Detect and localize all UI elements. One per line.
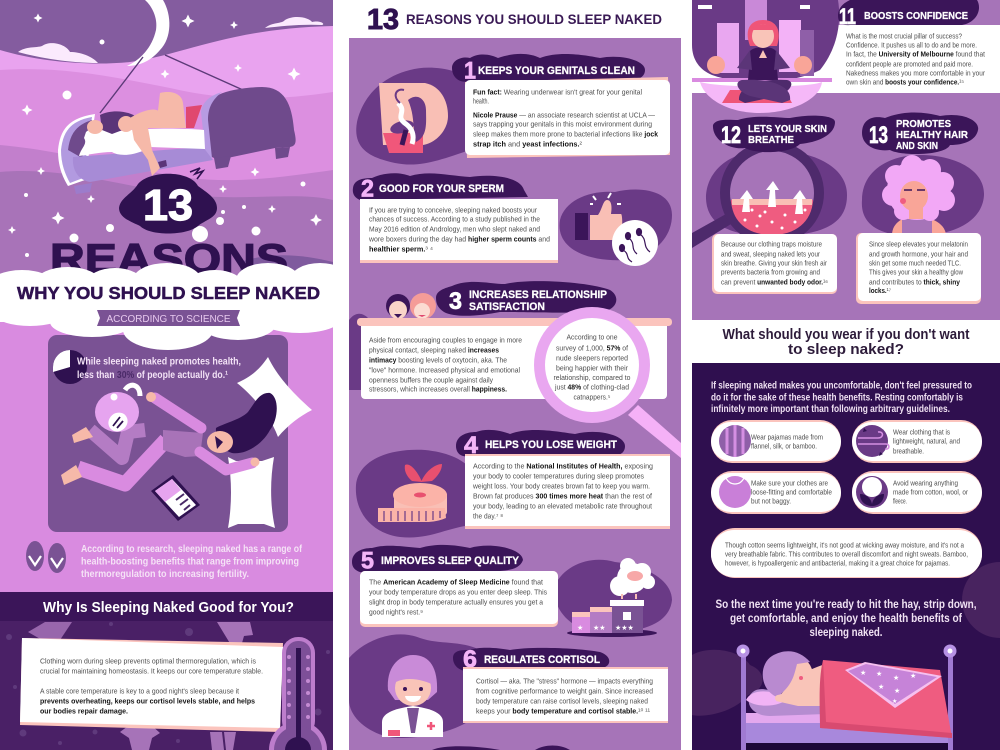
reason 3: increases relationship satisfaction: [349, 281, 681, 458]
next heading blob peek: [432, 746, 570, 750]
magnifier callout: nude sleepers reported: [556, 356, 628, 362]
card: and growth hormone, your hair and: [869, 252, 968, 258]
heading: why is sleeping naked good for you: Why Is Sleeping Naked Good for You?: [43, 599, 294, 616]
icon: crescent moon: [127, 0, 169, 66]
blob: [560, 190, 672, 260]
card: locks.¹⁷: [869, 288, 891, 295]
reason 4: helps you lose weight: [356, 430, 670, 537]
pill: avoid cotton: [852, 471, 982, 514]
card: can prevent unwanted body odor.¹⁶: [721, 280, 828, 286]
stars: [8, 14, 322, 257]
icon: thermometer: [269, 637, 327, 750]
card: Brown fat produces 300 times more heat than the rest of: [473, 494, 652, 500]
heading: KEEPS YOUR GENITALS CLEAN: [478, 65, 635, 77]
card: [463, 667, 668, 723]
pill: loose fitting: but not baggy.: [751, 498, 791, 506]
card: [856, 233, 981, 304]
card: stressors, which increases overall happiness.: [369, 386, 507, 394]
pill: cotton versus bamboo: [711, 528, 982, 578]
card: clothing worn during sleep: [20, 638, 283, 732]
card: This gives your skin a healthy glow: [869, 270, 964, 276]
pill: avoid cotton: Avoid wearing anything: [893, 480, 958, 488]
card: If you are trying to conceive, sleeping naked boosts your: [369, 208, 538, 214]
illustration: person sleeping in bed: ★: [876, 670, 882, 678]
heading: REGULATES CORTISOL: [484, 654, 600, 666]
heading: what should you wear: to sleep naked?: [788, 341, 904, 358]
heading: HELPS YOU LOSE WEIGHT: [485, 439, 617, 451]
magnifier callout: being happier with their: [556, 366, 629, 372]
text: closing statement: sleeping naked.: [810, 625, 882, 639]
illustration: woman with curly hair: [882, 155, 955, 235]
icon: pie chart 30 percent: [53, 350, 87, 384]
card: clothing worn during sleep: A stable core temperature is key to a good night's sleep because it: [40, 686, 240, 696]
text: according to research: According to research, sleeping naked has a range of: [81, 543, 302, 555]
heading: [838, 0, 979, 29]
card: According to the National Institutes of Health, exposing: [473, 464, 653, 470]
reason 6: regulates cortisol: [349, 634, 668, 738]
card: body temperature can raise cortisol levels, sleeping naked: [476, 698, 648, 706]
icon: sheep on podium: [567, 558, 657, 637]
panel: sleeping figure background: [48, 335, 288, 532]
background dots: [6, 622, 330, 745]
icon: slippers: [26, 541, 66, 573]
reason 11: boosts confidence: [692, 0, 986, 113]
card: skin get some much needed TLC.: [869, 260, 961, 268]
illustration: person sleeping in bed: ★: [894, 687, 900, 695]
icon: sheep on podium: ★: [577, 624, 583, 632]
magnifier callout: survey of 1,000, 57% of: [556, 346, 628, 352]
card: and contributes to thick, shiny: [869, 280, 960, 286]
heading: BOOSTS CONFIDENCE: [864, 11, 968, 22]
illustration: person sleeping in bed: ★: [892, 698, 897, 705]
card: your body, leading to an elevated metabolic rate throughout: [473, 504, 652, 510]
text: own skin and boosts your confidence.¹⁵: [846, 80, 964, 86]
text: statistic: While sleeping naked promotes health,: [77, 356, 241, 368]
card: [357, 318, 672, 399]
icon: couple: [386, 293, 436, 319]
heading: GOOD FOR YOUR SPERM: [379, 183, 504, 195]
heading: 5: [361, 548, 374, 574]
magnifier callout: relationship, compared to: [554, 375, 631, 382]
text: statistic: [77, 356, 241, 381]
card: says trapping your genitals in this moist environment during: [473, 122, 652, 128]
text: closing statement: get comfortable, and enjoy the health benefits of: [730, 611, 963, 625]
card: good night's rest.⁹: [369, 610, 423, 616]
heading: 6: [463, 646, 477, 673]
heading: LETS YOUR SKIN: [748, 124, 827, 135]
text: according to research: [81, 543, 302, 580]
reason 13: promotes healthy hair and skin: [856, 112, 984, 304]
card: [465, 77, 670, 158]
card: your body temperature drops as you enter deep sleep. This: [369, 590, 547, 596]
icon: sheep on podium: ★★: [593, 624, 606, 632]
panel: middle column heading: [367, 4, 662, 36]
card: strap itch and yeast infections. ²: [473, 142, 583, 148]
text: [846, 34, 986, 86]
blob: [349, 634, 480, 738]
reason 5: improves sleep quality: [352, 545, 672, 637]
text: advice intro: [711, 380, 972, 415]
small motion mark: [190, 168, 203, 179]
text: according to research: health-boosting benefits that range from improving: [81, 556, 299, 568]
card: sleep makes them more prone to bacterial infections like jock: [473, 132, 658, 138]
panel: left column hero: [0, 0, 350, 600]
card: clothing worn during sleep: crucial for maintaining homeostasis. It keeps our core temperature stable.: [40, 666, 263, 676]
heading: [713, 116, 835, 152]
magnifier callout: [534, 307, 681, 458]
illustration: person sleeping in bed: ★: [860, 669, 866, 677]
heading: 13: [869, 122, 888, 149]
heading: 11: [839, 4, 856, 29]
card: slight drop in body temperature actually ensures you get a: [369, 600, 543, 606]
pill: loose fitting: Make sure your clothes are: [751, 480, 828, 488]
text: closing statement: [716, 597, 976, 639]
heading: [436, 281, 616, 316]
card: [360, 571, 558, 627]
pill: cotton versus bamboo: Though cotton seems lightweight, it's not good at wicking away moisture, and it's not a: [725, 542, 964, 550]
card: Because our clothing traps moisture: [721, 242, 822, 248]
illustration: doctor: [382, 655, 443, 737]
card: wore boxers during the day had higher sperm counts and: [368, 236, 550, 244]
icon: wind: [856, 425, 889, 457]
heading: SATISFACTION: [469, 301, 545, 313]
illustration: person sleeping in bed: ★: [910, 672, 916, 680]
text: Nakedness makes you more comfortable in your: [846, 70, 986, 78]
text: statistic: less than 30% of people actually do.¹: [77, 370, 229, 381]
card: skin breathe. Giving your skin fresh air: [721, 260, 828, 268]
heading: 1: [464, 58, 476, 84]
text: Confidence. It pushes us all to do and be more.: [846, 42, 977, 50]
card: weight loss. Your body creates brown fat to keep you warm.: [472, 484, 650, 490]
card: clothing worn during sleep: Clothing worn during sleep prevents optimal thermoregulation, which is: [40, 656, 256, 666]
card: healthier sperm. ³ ⁴: [369, 246, 433, 254]
pill: pajamas: Wear pajamas made from: [751, 434, 823, 442]
text: advice intro: infinitely more important than following arbitrary guidelines.: [711, 404, 950, 415]
pill: avoid cotton: made from cotton, wool, or: [893, 490, 969, 496]
icon: measuring tape: [378, 464, 447, 522]
illustration: person sleeping in bed: ★: [878, 683, 884, 691]
card: and sweat, sleeping naked lets your: [721, 252, 821, 258]
heading: [862, 112, 978, 154]
card: prevents bacteria from growing and: [721, 270, 820, 276]
card: The American Academy of Sleep Medicine found that: [369, 580, 543, 586]
pill: pajamas: [711, 420, 841, 463]
pill: cotton versus bamboo: however, is hypoallergenic and antibacterial, making it a great choice for pajamas.: [725, 560, 950, 568]
reason 1: keeps your genitals clean: [356, 54, 670, 165]
card: clothing worn during sleep: our bodies repair damage.: [40, 706, 128, 716]
heading: AND SKIN: [896, 141, 938, 152]
text: What is the most crucial pillar of success?: [846, 34, 962, 40]
pill: loose fitting: [711, 471, 841, 514]
heading: IMPROVES SLEEP QUALITY: [381, 555, 520, 567]
heading: [453, 646, 609, 673]
heading: what should you wear: [722, 326, 970, 358]
card: from cognitive performance to weight gain. Since increased: [476, 688, 653, 696]
card: [360, 199, 558, 263]
pill: pajamas: flannel, silk, or bamboo.: [751, 444, 817, 450]
white cloud banner: [0, 263, 350, 350]
heading: INCREASES RELATIONSHIP: [469, 289, 607, 301]
card: Since sleep elevates your melatonin: [869, 242, 968, 248]
card: the day.⁷ ⁸: [473, 514, 503, 520]
text: In fact, the University of Melbourne found that: [846, 52, 985, 58]
sky clouds: [18, 17, 323, 63]
illustration: anatomy: [379, 83, 448, 153]
heading: [452, 54, 645, 84]
card: "love" hormone. Increased physical and emotional: [369, 368, 520, 374]
card: Cortisol — aka. The "stress" hormone — impacts everything: [476, 678, 653, 686]
heading: BREATHE: [748, 135, 794, 146]
heading: 3: [449, 288, 462, 315]
reason 2: good for your sperm: [353, 173, 672, 266]
card: [712, 234, 837, 294]
heading: 2: [361, 176, 374, 202]
card: [465, 454, 670, 529]
title: reasons: REASONS: [50, 235, 288, 282]
heading: 4: [464, 432, 479, 459]
card: openness buffers the couple against daily: [369, 378, 493, 384]
pill: breathable clothing: [852, 420, 982, 463]
icon: cotton plant: [856, 476, 888, 508]
text: confident people are promoted and paid more.: [846, 62, 973, 68]
panel: right column top: [692, 0, 1000, 320]
card: health.: [473, 98, 489, 106]
panel: middle column reasons: [349, 38, 681, 750]
blob behind number 13: [119, 174, 217, 234]
card: Aside from encouraging couples to engage in more: [369, 338, 522, 344]
heading: reasons you should sleep naked: REASONS YOU SHOULD SLEEP NAKED: [406, 11, 662, 27]
large number 13: 13: [367, 4, 399, 36]
blob: [555, 560, 672, 634]
illustration: person sleeping in bed: [736, 644, 956, 750]
heading: [352, 545, 523, 574]
card: keeps your body temperature and cortisol stable.¹⁰ ¹¹: [476, 708, 651, 716]
pill: breathable clothing: breathable.: [893, 448, 924, 456]
heading: PROMOTES: [896, 119, 951, 130]
magnifier callout: just 48% of clothing-clad: [554, 384, 629, 392]
decorative clothing icons: [28, 622, 253, 750]
illustration: restless sleeper: [61, 357, 312, 528]
blob: [706, 150, 847, 236]
heading: what should you wear: What should you wear if you don't want: [722, 326, 970, 343]
card: clothing worn during sleep: prevents overheating, keeps our cortisol levels stable, and helps: [40, 696, 255, 706]
pill: loose fitting: loose-fitting and comfortable: [751, 490, 832, 496]
panel: why is sleeping naked good: [0, 592, 333, 750]
illustration: floating bed: [58, 87, 296, 194]
heading: 12: [721, 122, 741, 149]
card: chances of success. According to a study published in the: [369, 216, 540, 224]
pill: breathable clothing: lightweight, natural, and: [893, 438, 960, 446]
pill: avoid cotton: fleece.: [893, 498, 907, 506]
illustration: person sleeping in bed: ★: [893, 674, 899, 682]
magnifier callout: According to one: [566, 334, 618, 342]
pill: breathable clothing: Wear clothing that is: [893, 430, 950, 436]
ropes: [100, 55, 243, 113]
icon: sheep on podium: ★★★: [615, 624, 634, 632]
blob: [862, 155, 984, 236]
illustration: meditating woman: [692, 0, 839, 113]
pill: cotton versus bamboo: very breathable fabric. This contributes to overall discomfort and night sweats. Bamboo,: [725, 552, 968, 558]
title number: 13: [143, 181, 193, 230]
magnifier callout: catnappers.⁵: [574, 394, 611, 402]
card: your body to cooler temperatures during sleep promotes: [473, 474, 644, 480]
reason 12: lets your skin breathe: [692, 116, 847, 294]
heading: HEALTHY HAIR: [896, 130, 969, 141]
decorative circles: [692, 562, 1000, 716]
blob: [349, 314, 368, 390]
heading: [353, 173, 528, 202]
text: according to research: thermoregulation to increasing fertility.: [81, 568, 249, 580]
card: May 2016 edition of Andrology, men who slept naked and: [369, 226, 540, 234]
card: intimacy boosting levels of oxytocin, aka. The: [369, 358, 507, 364]
card: physical contact, sleeping naked increases: [369, 348, 499, 354]
blob: [356, 450, 472, 537]
panel: dark clothing advice: [692, 363, 1000, 750]
icon: bamboo fabric: [719, 425, 751, 457]
banner: according to science: [97, 310, 240, 326]
heading: [456, 430, 625, 459]
banner: according to science: ACCORDING TO SCIENCE: [106, 313, 230, 325]
subtitle: WHY YOU SHOULD SLEEP NAKED: [17, 283, 320, 303]
icon: loose top: [719, 476, 751, 508]
card: Fun fact: Wearing underwear isn't great for your genital: [473, 90, 642, 96]
card: Nicole Prause — an associate research scientist at UCLA —: [473, 112, 655, 120]
icon: thumbs up and sperm: [575, 193, 658, 266]
blob: [356, 68, 470, 165]
illustration: magnifier on skin: [692, 141, 824, 248]
